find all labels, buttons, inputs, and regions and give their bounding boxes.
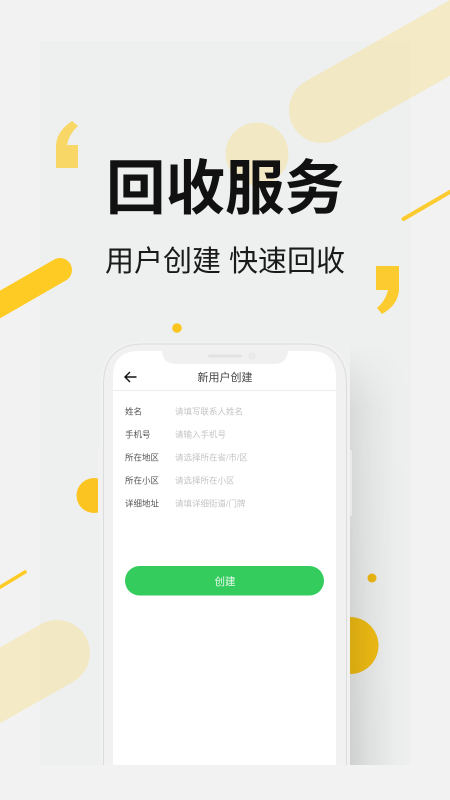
phone mockup (98, 341, 352, 765)
icon: closing quote mark (376, 266, 399, 314)
decorative pale bar top right (322, 4, 450, 110)
decorative small dot right (368, 574, 376, 582)
form: community: 请选择所在小区 (175, 476, 235, 486)
decorative thin line right (404, 189, 450, 219)
phone left button (98, 448, 101, 520)
phone notch (162, 351, 288, 364)
header divider (113, 390, 336, 391)
form: community: 所在小区 (125, 476, 160, 486)
screen title: 新用户创建 (198, 370, 252, 384)
notch camera (249, 353, 255, 359)
form: name (125, 406, 243, 416)
decorative yellow bar left (0, 270, 60, 316)
form: address: 请填详细街道/门牌 (175, 498, 246, 508)
form: region: 请选择所在省/市/区 (175, 452, 248, 462)
inner panel (40, 41, 410, 765)
subtitle: 用户创建 快速回收 (105, 245, 345, 278)
decorative yellow circle left (76, 478, 112, 513)
form: community (125, 476, 235, 486)
phone side button (350, 450, 352, 516)
form: region (125, 452, 248, 462)
decorative pale circle (226, 122, 288, 186)
form: phone: 请输入手机号 (175, 430, 226, 440)
create button: 创建 (214, 575, 236, 588)
title: 回收服务 (106, 155, 344, 222)
form: address (125, 498, 246, 508)
decorative thin line bottom left (0, 572, 25, 592)
icon: opening quote mark (56, 121, 78, 168)
phone edge line (104, 344, 346, 765)
form: address: 详细地址 (125, 498, 160, 508)
phone body (100, 341, 350, 765)
decorative yellow circle right (322, 617, 378, 674)
notch speaker (208, 354, 242, 358)
icon: back arrow (125, 372, 136, 382)
form: name: 请填写联系人姓名 (175, 406, 243, 416)
create button (125, 566, 324, 596)
phone shadow right (350, 368, 384, 765)
form: phone (125, 430, 226, 440)
form: phone: 手机号 (125, 430, 151, 440)
decorative pale bar bottom left (0, 653, 57, 708)
form: region: 所在地区 (125, 452, 160, 462)
form: name: 姓名 (125, 406, 142, 416)
phone screen (113, 351, 336, 765)
decorative small dot top (172, 323, 182, 333)
